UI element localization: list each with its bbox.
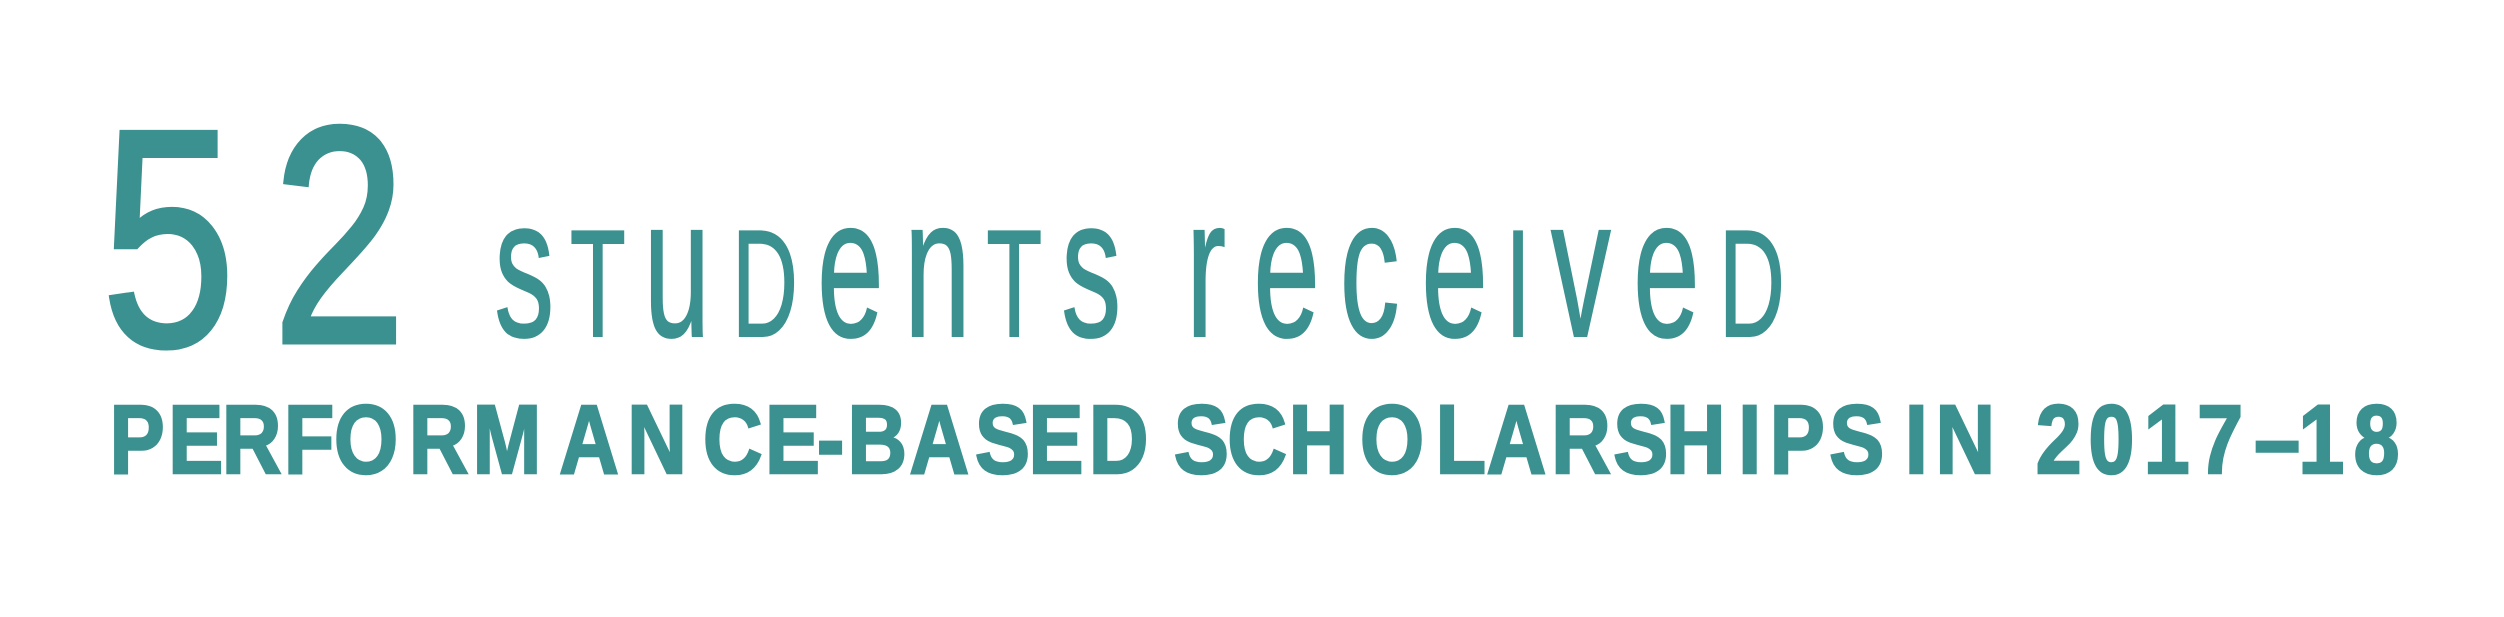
subtitle: performance-based scholarships in 2017–18 (110, 387, 2400, 495)
heading: students received: r (1186, 155, 1226, 378)
subtitle: performance-based scholarships in 2017–18: PERFORMANCE-BASED (110, 387, 1148, 495)
heading: students received: e (1421, 155, 1488, 378)
heading: students received: D (1719, 199, 1785, 369)
heading: students received: e (1253, 155, 1320, 378)
heading: students received (494, 155, 1785, 378)
heading: students received: s (494, 155, 554, 378)
heading: students received: c (1340, 155, 1399, 378)
big number: 52: 52 (101, 62, 406, 411)
heading: students received: u (644, 155, 710, 378)
heading: students received: D (732, 199, 798, 369)
heading: students received: I (1505, 199, 1531, 369)
subtitle: performance-based scholarships in 2017–18: 2017–18 (2036, 387, 2400, 495)
heading: students received: T (986, 199, 1042, 369)
subtitle: performance-based scholarships in 2017–18: SCHOLARSHIPS (1174, 387, 1884, 495)
heading: students received: e (1633, 155, 1700, 378)
heading: students received: n (904, 155, 971, 378)
heading: students received: s (1061, 155, 1121, 378)
heading: students received: e (817, 155, 884, 378)
heading: students received: T (570, 199, 626, 369)
subtitle: performance-based scholarships in 2017–18: IN (1905, 387, 1995, 495)
heading: students received: v (1551, 155, 1611, 378)
